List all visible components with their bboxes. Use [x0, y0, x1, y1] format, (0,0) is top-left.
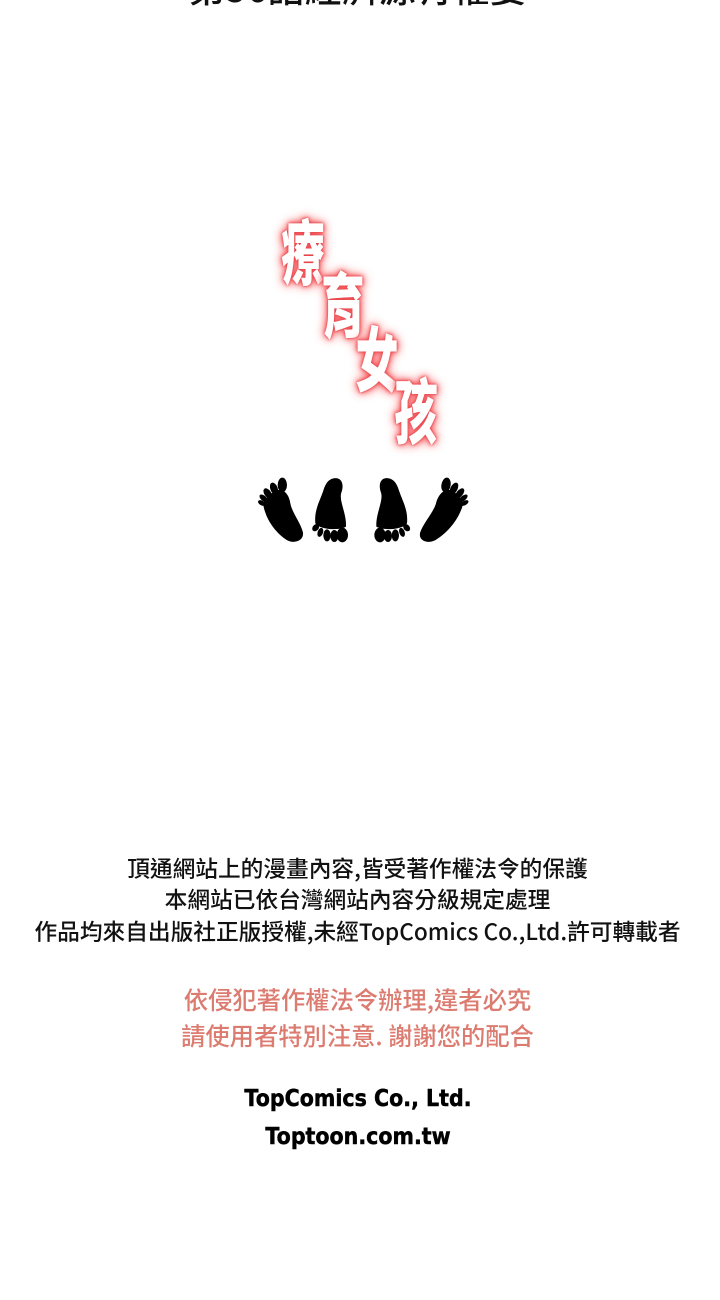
publisher name and website: [244, 1086, 471, 1150]
comic title: glowing logo: 育: [321, 251, 365, 353]
comic title: glowing logo: 女: [355, 305, 399, 407]
red legal warning: 請使用者特別注意. 謝謝您的配合: [181, 1017, 534, 1052]
red legal warning: [181, 981, 534, 1052]
comic title: glowing logo: 療: [281, 198, 325, 300]
copyright notice text: 本網站已依台灣網站內容分級規定處理: [165, 882, 550, 915]
red legal warning: 依侵犯著作權法令辦理,違者必究: [184, 981, 531, 1016]
copyright notice text: [34, 851, 681, 947]
icon: four black footprints: [258, 478, 468, 542]
copyright notice text: 頂通網站上的漫畫內容,皆受著作權法令的保護: [127, 851, 588, 884]
publisher name and website: TopComics Co., Ltd.: [244, 1086, 471, 1112]
comic title: glowing logo: 孩: [394, 357, 438, 459]
copyright notice text: 作品均來自出版社正版授權,未經TopComics Co.,Ltd.許可轉載者: [34, 914, 681, 947]
publisher name and website: Toptoon.com.tw: [265, 1124, 450, 1150]
comic title: glowing logo: [274, 198, 445, 459]
